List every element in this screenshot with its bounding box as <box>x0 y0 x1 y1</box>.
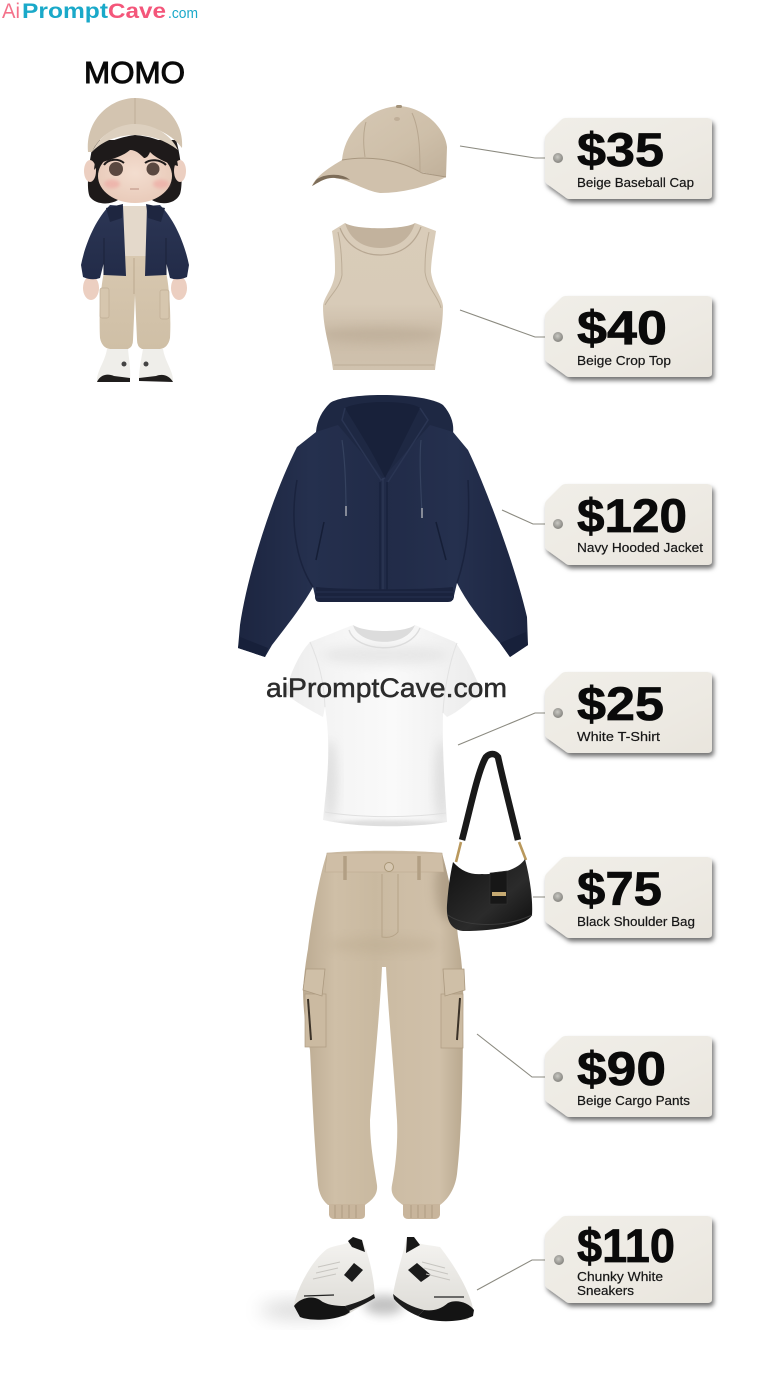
price tag: $40 <box>545 296 712 377</box>
price tag: $40: Beige Crop Top <box>577 353 671 368</box>
price tag: $110: Sneakers <box>577 1283 635 1298</box>
price tag: $110: Chunky White <box>577 1269 663 1284</box>
price tag: $90 <box>545 1036 712 1117</box>
item: beige baseball cap <box>312 105 447 193</box>
hair back <box>88 140 182 203</box>
hands <box>83 276 99 300</box>
price tag: $90: $90 <box>577 1042 666 1095</box>
price tag: $120: Navy Hooded Jacket <box>577 540 703 555</box>
connector: crop top <box>460 310 552 337</box>
heading: MOMO: MOMO <box>84 55 185 90</box>
logo: AiPromptCave.com: .com <box>168 6 198 22</box>
jacket <box>81 205 126 279</box>
logo: AiPromptCave.com <box>2 0 198 23</box>
connector: pants <box>477 1034 552 1077</box>
pants <box>100 252 170 349</box>
fringe <box>94 135 178 170</box>
price tag: $75 <box>545 857 712 938</box>
shoe shadow <box>260 1301 340 1319</box>
item: chunky white sneakers <box>260 1237 474 1321</box>
price tag: $35 <box>545 118 712 199</box>
price tag: $25: White T-Shirt <box>577 729 660 744</box>
price tag: $90: Beige Cargo Pants <box>577 1093 691 1108</box>
price tag: $40: $40 <box>577 301 667 354</box>
right shoe <box>393 1237 473 1320</box>
price tag: $35: $35 <box>577 123 664 176</box>
price tag: $120: $120 <box>577 489 687 542</box>
eyes <box>109 162 123 176</box>
logo: AiPromptCave.com: Prompt <box>22 0 108 23</box>
item: navy hooded jacket <box>238 395 528 657</box>
item: beige cargo pants <box>303 850 465 1219</box>
connector: bag <box>533 896 552 898</box>
item: beige crop top <box>320 223 443 370</box>
connector: sneakers <box>477 1260 552 1290</box>
item: white t-shirt <box>285 625 481 832</box>
price tag: $110: $110 <box>577 1219 675 1272</box>
price tag: $75: $75 <box>577 862 662 915</box>
left shoe <box>294 1237 375 1317</box>
price tag: $75: Black Shoulder Bag <box>577 914 695 929</box>
inner top <box>121 206 148 256</box>
price tag: $110 <box>545 1216 712 1303</box>
logo: AiPromptCave.com: Ai <box>2 0 20 23</box>
ears <box>84 160 96 182</box>
character: Momo figure <box>81 98 189 382</box>
shoes <box>97 349 130 382</box>
connector: cap <box>460 146 552 158</box>
price tag: $25: $25 <box>577 677 664 730</box>
watermark: aiPromptCave.com: aiPromptCave.com <box>266 673 507 703</box>
price tag: $25 <box>545 672 712 753</box>
face <box>98 149 172 203</box>
connector: jacket <box>502 510 552 524</box>
connector: t-shirt <box>458 713 552 745</box>
price tag: $35: Beige Baseball Cap <box>577 175 694 190</box>
cap <box>88 98 182 152</box>
logo: AiPromptCave.com: Cave <box>108 0 166 23</box>
price tag: $120 <box>545 484 712 565</box>
item: black shoulder bag <box>447 754 532 931</box>
